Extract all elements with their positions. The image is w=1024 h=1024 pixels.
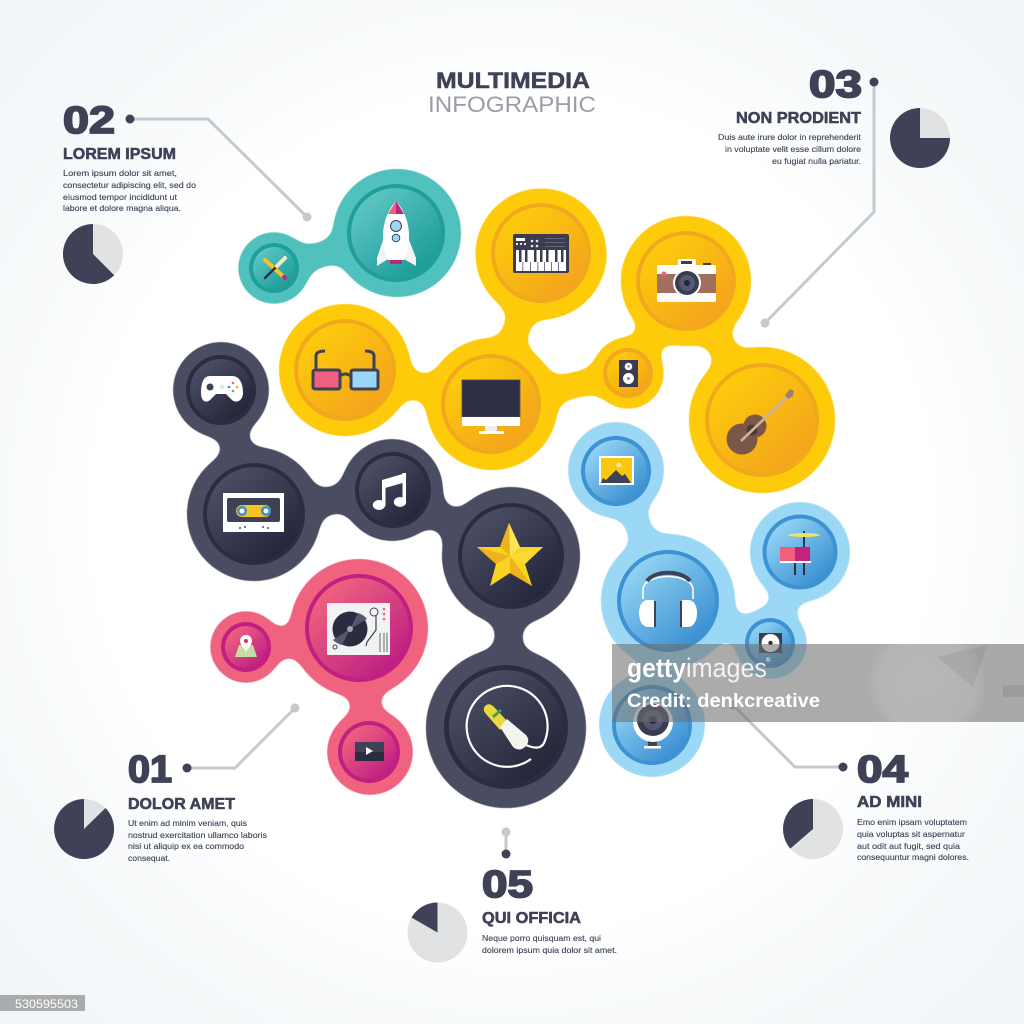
callout: 04 ad mini: AD MINI — [857, 794, 922, 811]
callout: 02 lorem ipsum: eiusmod tempor incididunt ut — [63, 192, 178, 202]
callout: 01 dolor amet: 01 — [128, 749, 172, 791]
callout: 02 lorem ipsum: consectetur adipiscing elit, sed do — [63, 180, 196, 190]
callout: 03 non prodient: Duis aute irure dolor in reprehenderit — [718, 132, 862, 142]
icon: audio jack and cable — [467, 686, 548, 767]
icon: video player — [355, 742, 384, 761]
callout: 03 non prodient: eu fugiat nulla pariatur. — [772, 156, 861, 166]
callout: 03 non prodient: NON PRODIENT — [736, 110, 861, 127]
callout: 01 dolor amet: Ut enim ad minim veniam, quis — [128, 818, 247, 828]
callout: 04 ad mini: consequuntur magni dolores. — [857, 852, 969, 862]
watermark band: getty — [627, 653, 686, 683]
icon: camera — [657, 259, 716, 302]
callout: 02 lorem ipsum: LOREM IPSUM — [63, 146, 176, 163]
pie chart 02 — [63, 224, 123, 284]
icon: drum kit — [780, 531, 820, 575]
watermark band: images — [686, 653, 767, 683]
callout: 01 dolor amet: nisi ut aliquip ex ea commodo — [128, 841, 244, 851]
watermark band — [612, 644, 1024, 722]
callout: 02 lorem ipsum — [63, 100, 196, 213]
icon: game controller — [201, 376, 243, 402]
icon: turntable — [327, 603, 390, 655]
title — [428, 68, 596, 117]
callout: 03 non prodient — [718, 64, 862, 166]
panel: teal cluster — [238, 168, 462, 304]
icon: rocket — [377, 201, 416, 266]
icon: music notes — [373, 473, 406, 510]
icon: desktop monitor — [462, 380, 520, 434]
callout: 01 dolor amet: nostrud exercitation ullamco laboris — [128, 830, 267, 840]
icon: picture frame — [599, 456, 634, 485]
callout: 01 dolor amet: consequat. — [128, 853, 170, 863]
callout: 04 ad mini — [857, 749, 969, 862]
icon: 3D glasses — [313, 351, 378, 389]
title: INFOGRAPHIC — [428, 92, 596, 117]
callout: 02 lorem ipsum: Lorem ipsum dolor sit amet, — [63, 168, 177, 178]
callout: 04 ad mini: quia voluptas sit aspernatur — [857, 829, 965, 839]
pie chart 05 — [408, 902, 468, 962]
watermark band: ® — [766, 657, 771, 664]
panel: dark cluster — [172, 342, 586, 808]
connector lines — [130, 82, 874, 854]
watermark band: Credit: denkcreative — [627, 691, 820, 712]
icon: webcam — [633, 702, 673, 748]
image id stamp — [0, 995, 85, 1011]
callout: 01 dolor amet: DOLOR AMET — [128, 796, 235, 813]
callout: 01 dolor amet — [128, 749, 267, 863]
icon: speaker disc — [759, 633, 782, 653]
connector end dots — [126, 78, 878, 858]
callout: 05 qui officia: QUI OFFICIA — [482, 910, 581, 927]
image id stamp: 530595503 — [15, 997, 78, 1011]
pie chart 01 — [54, 799, 114, 859]
callout: 04 ad mini: 04 — [857, 749, 908, 791]
icon: speaker — [619, 360, 638, 387]
icon: cassette tape — [223, 493, 284, 532]
icon: map pin — [235, 635, 257, 657]
callout: 03 non prodient: 03 — [809, 64, 862, 106]
callout: 04 ad mini: Emo enim ipsam voluptatem — [857, 817, 967, 827]
callout: 04 ad mini: aut odit aut fugit, sed quia — [857, 841, 960, 851]
panel: blue cluster — [568, 422, 850, 778]
callout: 02 lorem ipsum: labore et dolore magna aliqua. — [63, 203, 181, 213]
panel: yellow cluster — [278, 188, 836, 494]
icon: gold star — [477, 523, 543, 586]
icon: guitar — [726, 389, 794, 454]
pie chart 04 — [783, 799, 843, 859]
panel: pink cluster — [210, 558, 428, 796]
icon: headphones — [639, 573, 697, 627]
callout: 05 qui officia: dolorem ipsum quia dolor sit amet. — [482, 945, 617, 955]
callout: 03 non prodient: in voluptate velit esse cillum dolore — [725, 144, 861, 154]
title: MULTIMEDIA — [436, 68, 590, 93]
pie chart 03 — [890, 108, 950, 168]
callout: 02 lorem ipsum: 02 — [63, 100, 115, 142]
callout: 05 qui officia: 05 — [482, 864, 533, 906]
callout: 05 qui officia: Neque porro quisquam est, qui — [482, 933, 601, 943]
icon: pencil and brush — [265, 258, 285, 278]
icon: keyboard synth — [513, 234, 569, 273]
callout: 05 qui officia — [482, 864, 617, 955]
